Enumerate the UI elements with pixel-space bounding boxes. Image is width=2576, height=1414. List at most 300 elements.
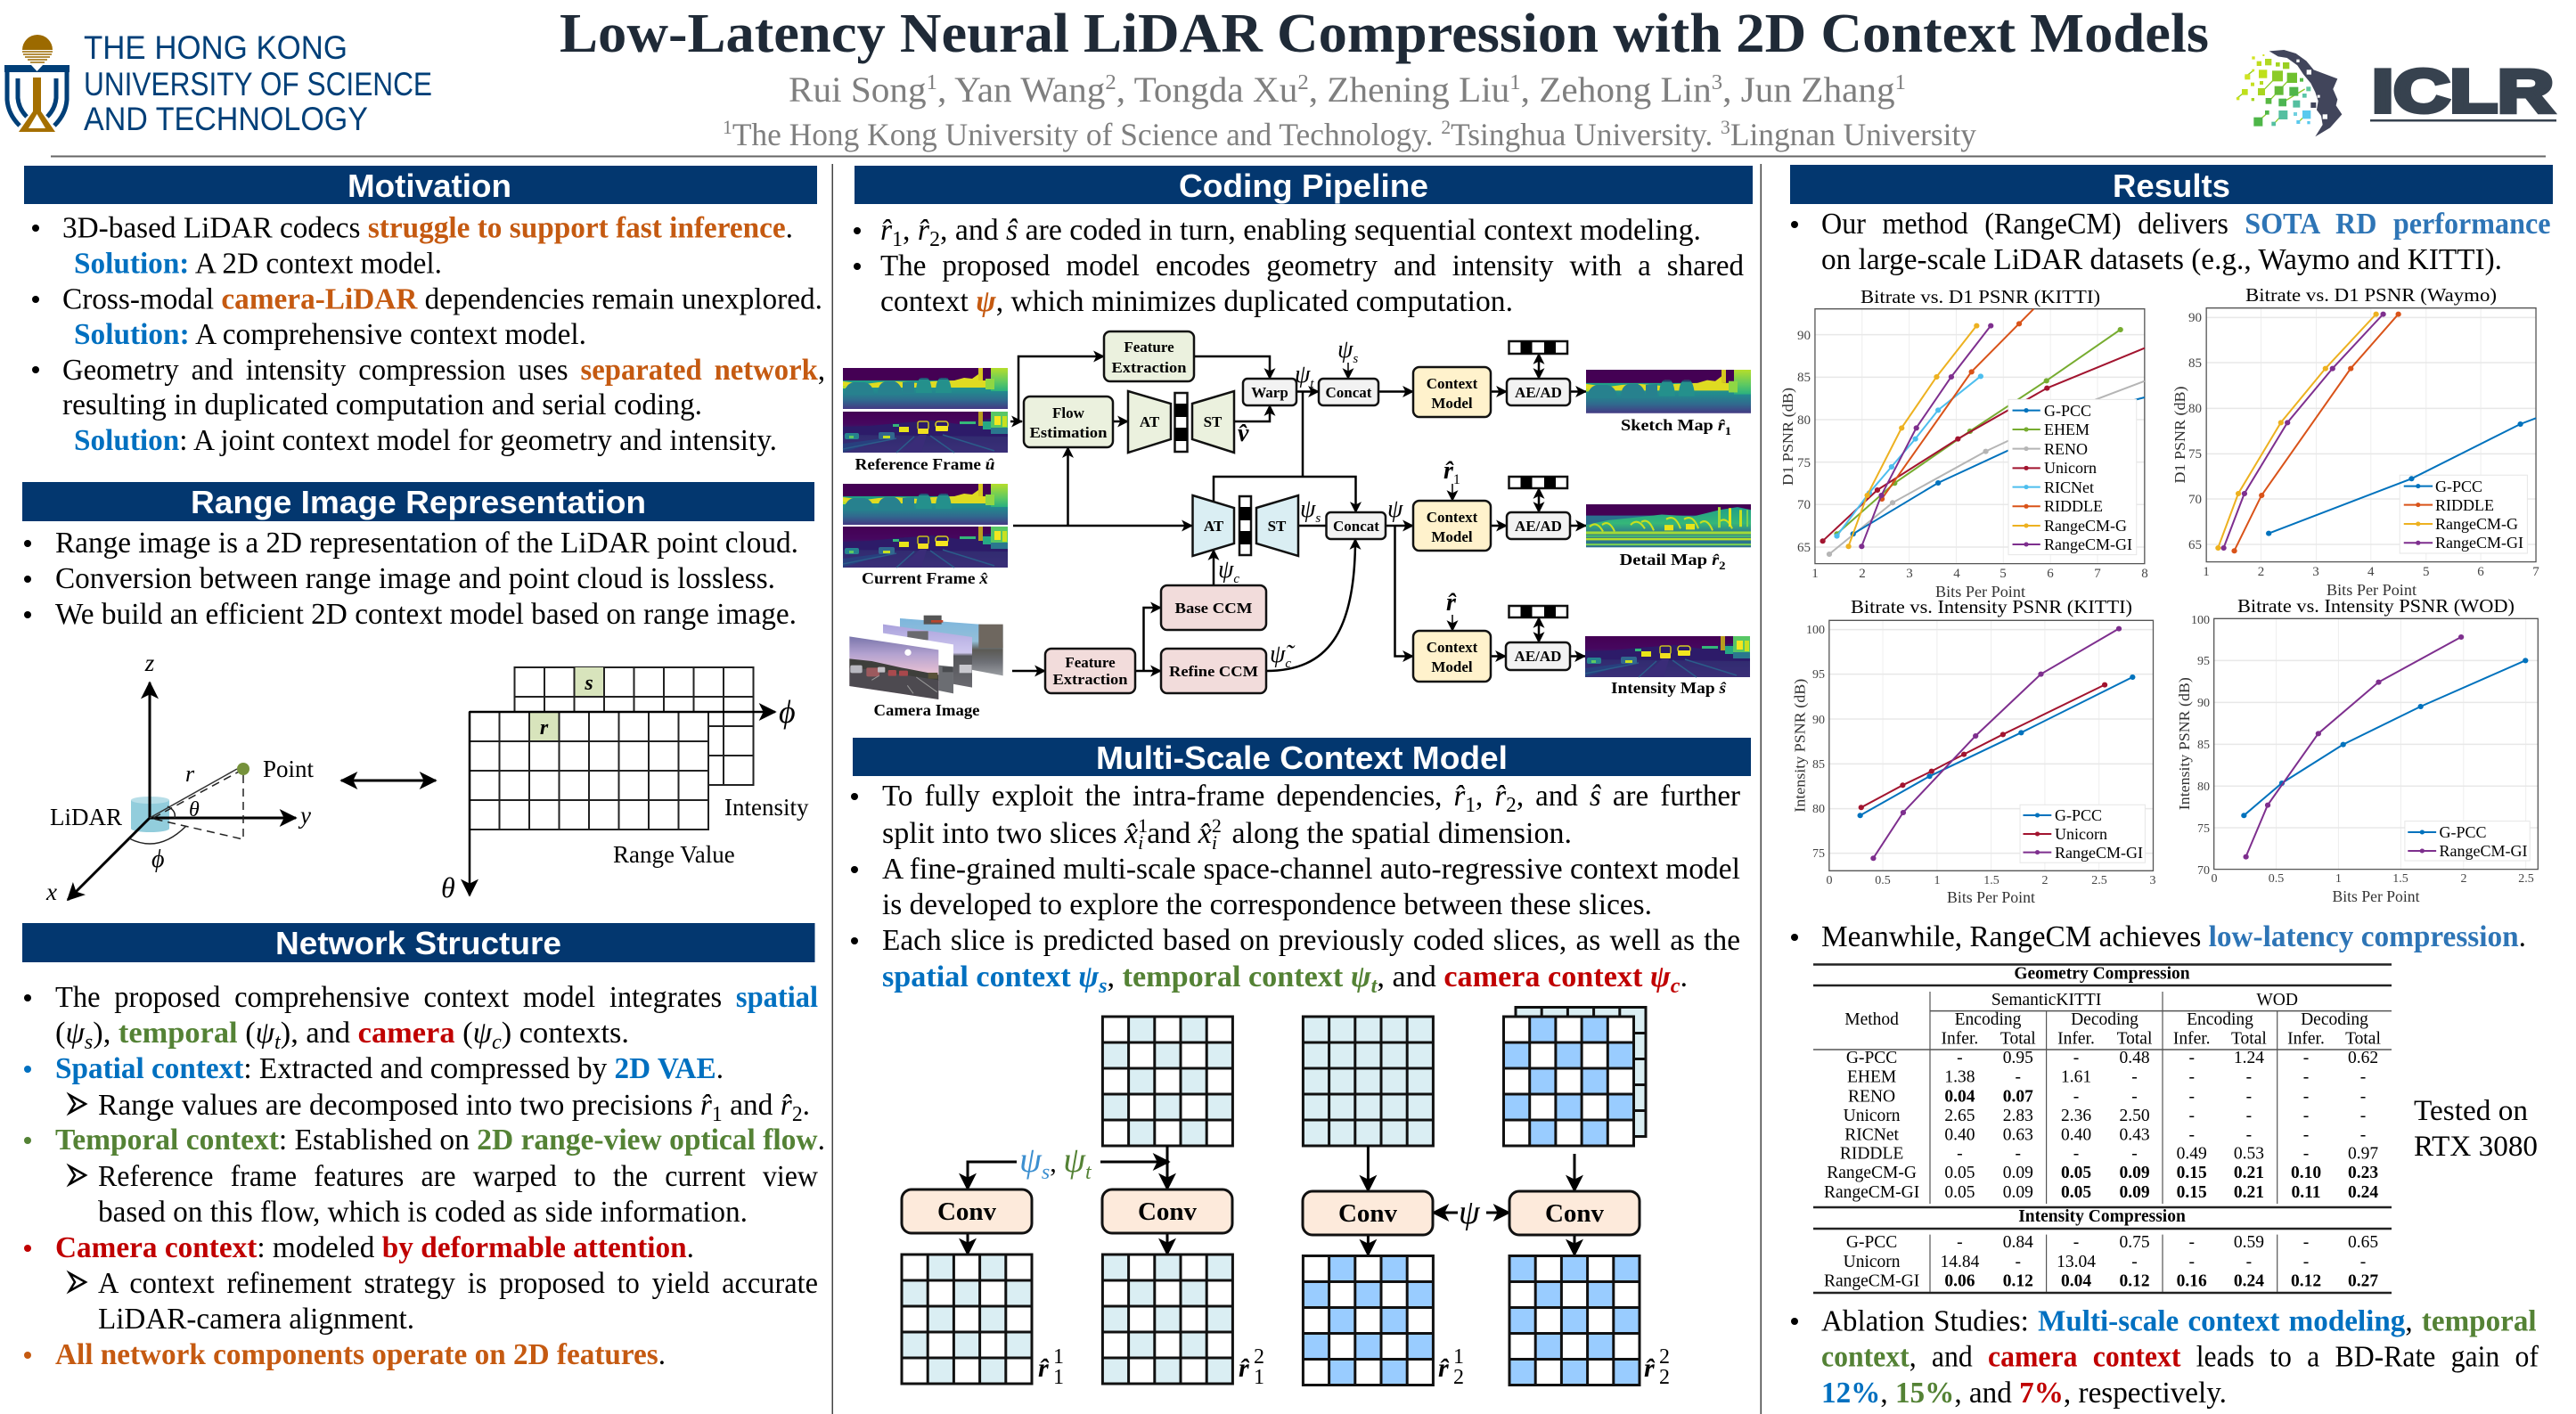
chart: bitrate vs D1 PSNR Waymo: 80	[2188, 402, 2202, 416]
text block: motivation bullets: 3D-based LiDAR codecs struggle to support fast inference.	[62, 212, 793, 244]
table rows: geometry compression: EHEM	[1847, 1068, 1896, 1087]
text block: multi-scale bullets: is developed to explore the correspondence between these slices.	[882, 888, 1652, 921]
table rows: intensity compression: -	[2188, 1233, 2195, 1252]
labels: pipeline math symbols: ψ	[1300, 495, 1315, 523]
box: conv 1	[902, 1189, 1032, 1233]
panel: network structure	[22, 923, 825, 1371]
chart: bitrate vs D1 PSNR KITTI: RIDDLE	[2044, 497, 2103, 515]
labels: slice names: 1	[1254, 1366, 1264, 1389]
table rows: geometry compression: 0.40	[1944, 1126, 1975, 1144]
table rows: geometry compression: 0.09	[2003, 1183, 2033, 1202]
table rows: intensity compression: -	[1957, 1233, 1963, 1252]
heading: motivation	[24, 166, 817, 204]
text block: multi-scale bullets: along the spatial dimension.	[1224, 817, 1572, 850]
text block: network structure bullets: A context refinement strategy is proposed to yield accurate	[98, 1267, 818, 1300]
table rows: geometry compression: -	[2073, 1145, 2079, 1164]
table rows: intensity compression: G-PCC	[1846, 1233, 1897, 1252]
box: base CCM: Base CCM	[1174, 600, 1253, 617]
chart: bitrate vs D1 PSNR KITTI: D1 PSNR (dB)	[1779, 388, 1796, 486]
heading: coding pipeline	[855, 166, 1753, 204]
chart: bitrate vs D1 PSNR KITTI: G-PCC	[2044, 402, 2091, 420]
box: conv 2	[1102, 1189, 1232, 1233]
table rows: geometry compression: -	[2360, 1107, 2366, 1125]
authors: 2	[1105, 71, 1116, 94]
authors: , Zehong Lin	[1521, 69, 1712, 110]
table column headers: Total	[2231, 1030, 2267, 1049]
label: detail map: 2	[1719, 559, 1725, 572]
authors: , Jun Zhang	[1722, 69, 1895, 110]
grid: input full light	[1303, 1017, 1433, 1146]
autoencoder: main AT and ST: ST	[1268, 518, 1287, 535]
text block: coding pipeline bullets: ŝ are coded in turn, enabling sequential context modeling.	[1006, 214, 1706, 247]
table rows: geometry compression: -	[2016, 1145, 2021, 1164]
labels: pipeline math symbols: s	[1315, 511, 1321, 526]
title: Low-Latency Neural LiDAR Compression with 2D Context Models	[560, 4, 2209, 64]
diagram: LiDAR spherical coordinates: y	[298, 802, 311, 829]
chart: bitrate vs D1 PSNR Waymo	[2171, 284, 2539, 599]
chart: bitrate vs D1 PSNR Waymo: 1	[2203, 565, 2210, 579]
diagram: LiDAR spherical coordinates: θ	[189, 798, 200, 821]
text block: multi-scale bullets: A fine-grained multi-scale space-channel auto-regressive context model	[882, 853, 1740, 886]
grid: output r1 slice 2	[1102, 1255, 1232, 1384]
chart: bitrate vs D1 PSNR Waymo: 2	[2258, 565, 2264, 579]
chart: bitrate vs D1 PSNR KITTI: 7	[2094, 567, 2101, 581]
chart: bitrate vs D1 PSNR Waymo: 75	[2188, 447, 2202, 462]
table rows: geometry compression: 0.62	[2348, 1049, 2378, 1067]
chart: bitrate vs D1 PSNR Waymo: 85	[2188, 356, 2202, 371]
table column headers: Infer.	[1942, 1030, 1978, 1049]
table rows: geometry compression: -	[2303, 1145, 2309, 1164]
table rows: geometry compression: -	[2303, 1068, 2309, 1087]
text block: ablation studies: context, and camera context leads to a BD-Rate gain of	[1821, 1341, 2539, 1374]
authors: 1	[927, 71, 937, 94]
text block: network structure bullets: Spatial context: Extracted and compressed by 2D VAE.	[55, 1052, 724, 1085]
labels: pipeline math symbols: t	[1310, 377, 1314, 391]
label: reference frame: Reference Frame û	[855, 455, 994, 473]
labels: slice names: r̂	[1644, 1353, 1655, 1383]
chart: bitrate vs D1 PSNR KITTI: RENO	[2044, 440, 2088, 458]
chart: bitrate vs intensity PSNR KITTI: 1.5	[1983, 874, 1999, 887]
box: flow estimation: Flow	[1052, 405, 1085, 421]
text block: multi-scale bullets: x̂	[1198, 817, 1212, 850]
label: shared context: ψ	[1459, 1194, 1481, 1231]
chart: bitrate vs D1 PSNR KITTI: 3	[1906, 567, 1913, 581]
text block: low-latency statement: Meanwhile, RangeCM achieves low-latency compression.	[1821, 920, 2526, 953]
table rows: geometry compression: 2.50	[2119, 1107, 2150, 1125]
table rows: geometry compression: 0.24	[2348, 1183, 2378, 1202]
table rows: intensity compression: -	[2188, 1253, 2195, 1271]
heading: coding pipeline: Coding Pipeline	[1179, 168, 1428, 204]
image: intensity map	[1585, 636, 1750, 677]
chart: bitrate vs D1 PSNR KITTI: Bitrate vs. D1 PSNR (KITTI)	[1860, 286, 2100, 307]
bitstream 3	[1509, 606, 1567, 617]
box: refine CCM	[1161, 649, 1266, 693]
table heading: intensity: Intensity Compression	[2018, 1207, 2186, 1226]
table column headers: Infer.	[2173, 1030, 2211, 1049]
autoencoder: flow AT and ST: ST	[1204, 413, 1223, 430]
affiliations: Lingnan University	[1730, 117, 1976, 152]
diagram: LiDAR spherical coordinates: z	[144, 650, 155, 676]
table rows: intensity compression: 13.04	[2057, 1253, 2096, 1271]
chart: bitrate vs D1 PSNR Waymo: 70	[2188, 493, 2202, 507]
table column headers: SemanticKITTI	[1991, 991, 2101, 1009]
box: feature extraction top: Feature	[1124, 339, 1174, 356]
labels: pipeline math symbols: ψ	[1218, 556, 1233, 584]
chart: bitrate vs D1 PSNR KITTI: 65	[1797, 541, 1811, 555]
table rows: geometry compression: 0.97	[2348, 1145, 2378, 1164]
chart: bitrate vs D1 PSNR KITTI: Unicorn	[2044, 459, 2097, 477]
panel: results	[1779, 165, 2553, 1410]
text: university name: UNIVERSITY OF SCIENCE	[84, 66, 432, 102]
text block: motivation bullets	[32, 212, 825, 457]
logo: ICLR	[2237, 50, 2556, 136]
text block: results intro: on large-scale LiDAR datasets (e.g., Waymo and KITTI).	[1821, 243, 2502, 276]
text block: network structure bullets: s	[85, 1031, 93, 1054]
affiliations: 3	[1721, 116, 1730, 138]
chart: bitrate vs intensity PSNR WOD	[2176, 595, 2538, 905]
text block: coding pipeline bullets: , and	[940, 214, 1006, 247]
table column headers: Encoding	[2187, 1010, 2253, 1029]
text block: network structure bullets: based on this flow, which is coded as side information.	[98, 1196, 748, 1229]
table rows: intensity compression: -	[2073, 1233, 2079, 1252]
chart: bitrate vs intensity PSNR WOD: Intensity PSNR (dB)	[2176, 677, 2193, 810]
labels: pipeline math symbols: ψ̃	[1270, 641, 1285, 668]
labels: slice names: r̂	[1438, 1353, 1449, 1383]
chart: bitrate vs D1 PSNR KITTI: Bits Per Point	[1935, 583, 2025, 601]
image: current frame maps	[843, 484, 1008, 568]
heading: motivation: Motivation	[348, 168, 511, 204]
box: context model 2: Model	[1431, 528, 1473, 545]
chart: bitrate vs intensity PSNR KITTI: Bits Per Point	[1947, 888, 2035, 906]
chart: bitrate vs intensity PSNR KITTI: G-PCC	[2055, 806, 2102, 824]
table rows: intensity compression: -	[2303, 1233, 2309, 1252]
table rows: intensity compression: 0.04	[2061, 1272, 2091, 1290]
text block: network structure bullets: temporal (ψ	[119, 1017, 274, 1050]
table rows: geometry compression: 0.21	[2234, 1164, 2264, 1182]
text block: coding pipeline bullets: The proposed model encodes geometry and intensity with a shared	[880, 249, 1744, 282]
heading: results: Results	[2113, 168, 2230, 204]
text block: motivation bullets: Solution: A comprehensive context model.	[74, 318, 586, 351]
table rows: intensity compression: 0.24	[2234, 1272, 2264, 1290]
chart: bitrate vs intensity PSNR KITTI: 2	[2042, 874, 2048, 887]
table rows: geometry compression: 0.21	[2234, 1183, 2264, 1202]
chart: bitrate vs intensity PSNR WOD: 1	[2335, 872, 2342, 886]
diagram: LiDAR spherical coordinates: LiDAR	[50, 804, 122, 830]
table rows: geometry compression: 0.15	[2177, 1164, 2207, 1182]
chart: bitrate vs D1 PSNR KITTI: 75	[1797, 456, 1811, 470]
box: context model 3: Context	[1427, 639, 1478, 656]
chart: bitrate vs intensity PSNR WOD: 70	[2197, 864, 2210, 878]
text block: motivation bullets: resulting in duplicated computation and serial coding.	[62, 388, 702, 421]
chart: bitrate vs intensity PSNR WOD: 1.5	[2392, 872, 2408, 886]
table column headers: WOD	[2256, 991, 2298, 1009]
chart: bitrate vs intensity PSNR KITTI: 100	[1806, 624, 1825, 637]
text block: multi-scale bullets: r̂	[1494, 780, 1507, 813]
table rows: geometry compression: 0.10	[2291, 1164, 2321, 1182]
chart: bitrate vs intensity PSNR WOD: Bitrate vs. Intensity PSNR (WOD)	[2237, 595, 2515, 617]
table rows: geometry compression: 0.48	[2119, 1049, 2150, 1067]
box: context model 1: Context	[1427, 375, 1478, 392]
labels: slice names: 2	[1453, 1366, 1464, 1389]
text block: network structure bullets: All network components operate on 2D features.	[55, 1338, 666, 1371]
text block: motivation bullets: Solution: A joint context model for geometry and intensity.	[74, 424, 777, 457]
labels: pipeline math symbols: ψ	[1387, 495, 1403, 523]
chart: bitrate vs intensity PSNR KITTI: 0	[1827, 874, 1832, 887]
heading: range image representation	[22, 482, 814, 521]
chart: bitrate vs intensity PSNR WOD: 75	[2197, 822, 2210, 836]
text block: multi-scale bullets: 1	[1138, 814, 1148, 837]
table rows: intensity compression: 0.16	[2177, 1272, 2207, 1290]
affiliations: The Hong Kong University of Science and Technology.	[732, 117, 1441, 152]
box: context model 2: Context	[1427, 509, 1478, 526]
chart: bitrate vs D1 PSNR KITTI: 80	[1797, 413, 1811, 428]
diagram: range image grids: s	[584, 672, 593, 695]
box: concat top: Concat	[1326, 384, 1372, 401]
chart: bitrate vs D1 PSNR Waymo: RangeCM-G	[2435, 515, 2518, 533]
text block: network structure bullets: 2	[792, 1103, 803, 1126]
chart: bitrate vs intensity PSNR KITTI: Intensity PSNR (dB)	[1791, 679, 1809, 813]
table rows: intensity compression: -	[2246, 1253, 2252, 1271]
box: concat middle: Concat	[1333, 518, 1379, 535]
text block: network structure bullets: ),	[93, 1017, 119, 1050]
text block: network structure bullets: Reference frame features are warped to the current view	[98, 1160, 818, 1193]
text block: network structure bullets: Camera context: modeled by deformable attention.	[55, 1231, 694, 1264]
table column headers: Total	[2117, 1030, 2153, 1049]
heading: multi-scale context model	[853, 738, 1751, 776]
chart: bitrate vs intensity PSNR WOD: 0	[2212, 872, 2217, 886]
grid: output r1 slice 1	[902, 1255, 1032, 1384]
table rows: intensity compression: 0.06	[1944, 1272, 1975, 1290]
table rows: intensity compression: Unicorn	[1844, 1253, 1901, 1271]
label: spatial and temporal context: t	[1085, 1161, 1092, 1184]
table column headers: Decoding	[2071, 1010, 2138, 1029]
bitstream 1	[1509, 341, 1567, 354]
text block: motivation bullets: Solution: A 2D context model.	[74, 248, 442, 280]
chart: bitrate vs intensity PSNR KITTI: Bitrate vs. Intensity PSNR (KITTI)	[1851, 596, 2132, 617]
table rows: intensity compression	[1824, 1233, 2378, 1290]
chart: bitrate vs intensity PSNR WOD: RangeCM-GI	[2440, 842, 2527, 860]
chart: bitrate vs D1 PSNR KITTI: 4	[1953, 567, 1960, 581]
text block: range image bullets: We build an efficient 2D context model based on range image.	[55, 598, 797, 631]
table rows: geometry compression: 0.53	[2234, 1145, 2264, 1164]
text block: network structure bullets	[24, 981, 825, 1371]
chart: bitrate vs D1 PSNR KITTI: RangeCM-G	[2044, 517, 2127, 535]
panel: coding pipeline	[843, 166, 1753, 719]
table rows: geometry compression: -	[2188, 1107, 2195, 1125]
heading: multi-scale context model: Multi-Scale Context Model	[1096, 740, 1508, 776]
chart: bitrate vs D1 PSNR Waymo: 4	[2367, 565, 2375, 579]
text block: network structure bullets: .	[803, 1089, 810, 1122]
box: base CCM	[1161, 585, 1266, 630]
chart: bitrate vs intensity PSNR KITTI: 0.5	[1875, 874, 1891, 887]
table rows: geometry compression: -	[2188, 1087, 2195, 1106]
table rows: geometry compression: 0.63	[2003, 1126, 2033, 1144]
chart: bitrate vs D1 PSNR KITTI: 2	[1859, 567, 1866, 581]
grid: stacked input	[1504, 1007, 1646, 1146]
text block: multi-scale bullets: 1	[1465, 794, 1476, 817]
text block: motivation bullets: Geometry and intensity compression uses separated network,	[62, 354, 825, 387]
text block: range image bullets: Conversion between range image and point cloud is lossless.	[55, 562, 775, 595]
image: reference frame maps	[843, 368, 1008, 453]
table rows: geometry compression: 0.05	[1944, 1164, 1975, 1182]
table rows: intensity compression: -	[2131, 1253, 2138, 1271]
text block: multi-scale bullets: spatial context ψ	[882, 960, 1099, 993]
text block: ablation studies	[1791, 1304, 2539, 1410]
table rows: intensity compression: 0.27	[2348, 1272, 2378, 1290]
chart: bitrate vs intensity PSNR KITTI: 90	[1812, 714, 1825, 727]
text block: multi-scale bullets: , and	[1377, 960, 1443, 993]
box: AE/AD 3: AE/AD	[1515, 648, 1561, 665]
label: sketch map: Sketch Map r̂	[1621, 416, 1724, 434]
table rows: geometry compression: 0.09	[2003, 1164, 2033, 1182]
table rows: geometry compression: Unicorn	[1844, 1107, 1901, 1125]
table rows: geometry compression: 1.61	[2061, 1068, 2091, 1087]
table rows: geometry compression: -	[1957, 1145, 1963, 1164]
table rows: geometry compression: -	[2131, 1087, 2138, 1106]
labels: pipeline math symbols: 1	[1453, 472, 1460, 487]
table rows: geometry compression: -	[2188, 1126, 2195, 1144]
box: conv 1: Conv	[937, 1197, 997, 1226]
table heading: geometry: Geometry Compression	[2014, 965, 2190, 984]
box: conv 3	[1303, 1191, 1433, 1235]
labels: slice names: r̂	[1239, 1353, 1249, 1383]
chart: bitrate vs intensity PSNR KITTI: 1	[1934, 874, 1941, 887]
chart: bitrate vs intensity PSNR KITTI: 80	[1812, 803, 1825, 816]
chart: bitrate vs D1 PSNR KITTI: 5	[1999, 567, 2007, 581]
box: warp	[1243, 379, 1296, 405]
text block: network structure bullets: Range values are decomposed into two precisions r̂	[98, 1089, 712, 1122]
bitstream 2	[1509, 477, 1567, 488]
chart: bitrate vs D1 PSNR Waymo: RIDDLE	[2435, 496, 2494, 514]
affiliations: Tsinghua University.	[1451, 117, 1721, 152]
table rows: geometry compression: G-PCC	[1846, 1049, 1897, 1067]
chart: bitrate vs D1 PSNR Waymo: 6	[2477, 565, 2484, 579]
table rows: intensity compression: 0.12	[2291, 1272, 2321, 1290]
labels: pipeline math symbols	[1218, 336, 1460, 671]
chart: bitrate vs D1 PSNR KITTI: 1	[1811, 567, 1819, 581]
box: feature extraction top: Extraction	[1112, 359, 1187, 376]
authors: , Zhening Liu	[1309, 69, 1509, 110]
table rows: geometry compression: -	[2246, 1126, 2252, 1144]
text block: multi-scale bullets	[851, 780, 1741, 998]
box: concat top	[1319, 379, 1378, 405]
chart: bitrate vs D1 PSNR KITTI: RangeCM-GI	[2044, 535, 2132, 553]
diagram: LiDAR spherical coordinates: ϕ	[151, 846, 164, 873]
text block: network structure bullets: and	[723, 1089, 781, 1122]
chart: bitrate vs intensity PSNR KITTI: Unicorn	[2055, 825, 2107, 843]
image: detail map	[1586, 504, 1751, 547]
chart: bitrate vs D1 PSNR Waymo: D1 PSNR (dB)	[2171, 387, 2188, 483]
box: context model 1: Model	[1431, 395, 1473, 412]
authors: 1	[1509, 71, 1521, 94]
table rows: geometry compression: -	[2360, 1068, 2366, 1087]
box: conv 3: Conv	[1338, 1199, 1398, 1228]
table rows: geometry compression: 0.23	[2348, 1164, 2378, 1182]
chart: bitrate vs D1 PSNR Waymo: 90	[2188, 311, 2202, 325]
autoencoder: flow AT and ST	[1128, 391, 1234, 453]
table rows: geometry compression: 0.05	[2061, 1183, 2091, 1202]
table rows: geometry compression: -	[2131, 1068, 2138, 1087]
diagram: LiDAR spherical coordinates	[45, 650, 315, 905]
text block: network structure bullets: LiDAR-camera alignment.	[98, 1303, 414, 1336]
chart: bitrate vs intensity PSNR KITTI: 2.5	[2091, 874, 2107, 887]
text block: coding pipeline bullets	[854, 214, 1744, 318]
text block: results intro: Our method (RangeCM) delivers SOTA RD performance	[1821, 208, 2550, 241]
diagram: range image grids: r	[540, 716, 549, 740]
text: university name: AND TECHNOLOGY	[84, 101, 368, 137]
box: context model 3	[1413, 631, 1491, 682]
table rows: intensity compression: -	[2016, 1253, 2021, 1271]
table rows: geometry compression: -	[2073, 1049, 2079, 1067]
labels: pipeline math symbols: c	[1285, 657, 1291, 671]
table rows: intensity compression: 14.84	[1940, 1253, 1980, 1271]
box: AE/AD 2: AE/AD	[1515, 518, 1562, 535]
text block: motivation bullets: Cross-modal camera-LiDAR dependencies remain unexplored.	[62, 283, 822, 315]
table rows: geometry compression: -	[1957, 1049, 1963, 1067]
arrows: pipeline connections	[1010, 354, 1586, 671]
table rows: geometry compression: 0.49	[2177, 1145, 2207, 1164]
labels: pipeline math symbols: ψ	[1295, 361, 1310, 388]
box: flow estimation: Estimation	[1030, 424, 1108, 441]
label: current frame: Current Frame x̂	[862, 569, 988, 587]
box: AE/AD 1	[1507, 379, 1570, 405]
table rows: geometry compression: -	[2131, 1145, 2138, 1164]
text block: multi-scale bullets: ŝ are further	[1590, 780, 1745, 813]
table rows: geometry compression: RENO	[1848, 1087, 1895, 1106]
text block: multi-scale bullets: s	[1098, 975, 1107, 998]
labels: slice names: 1	[1053, 1366, 1064, 1389]
chart: bitrate vs D1 PSNR KITTI: 70	[1797, 498, 1811, 512]
grid: input slice checkerboard	[1102, 1017, 1232, 1146]
chart: bitrate vs intensity PSNR WOD: G-PCC	[2440, 823, 2487, 841]
table rows: geometry compression: -	[2360, 1087, 2366, 1106]
box: AE/AD 3	[1506, 642, 1570, 670]
table rows: geometry compression: 2.65	[1944, 1107, 1975, 1125]
text block: multi-scale bullets: temporal context ψ	[1123, 960, 1371, 993]
box: conv 4	[1509, 1191, 1640, 1235]
text block: network structure bullets: r̂	[781, 1089, 793, 1122]
table rows: geometry compression: 0.09	[2119, 1164, 2150, 1182]
diagram: range image grids: Intensity	[724, 794, 809, 821]
table rows: geometry compression: -	[2303, 1087, 2309, 1106]
table rows: geometry compression: 1.38	[1944, 1068, 1975, 1087]
table rows: geometry compression: RangeCM-G	[1827, 1164, 1917, 1182]
authors: , Yan Wang	[937, 69, 1105, 110]
text block: multi-scale bullets: 2	[1506, 794, 1517, 817]
chart: bitrate vs intensity PSNR WOD: 0.5	[2269, 872, 2284, 886]
table column headers	[1844, 991, 2381, 1049]
text block: network structure bullets: (ψ	[55, 1017, 85, 1050]
chart: bitrate vs intensity PSNR KITTI	[1791, 596, 2156, 906]
table rows: geometry compression: 0.05	[1944, 1183, 1975, 1202]
text block: multi-scale bullets: i	[1212, 831, 1217, 854]
chart: bitrate vs intensity PSNR KITTI: 85	[1812, 758, 1825, 772]
diagram: checkerboard context model	[902, 1007, 1670, 1389]
table column headers: Infer.	[2287, 1030, 2325, 1049]
chart: bitrate vs intensity PSNR WOD: 90	[2197, 697, 2210, 710]
diagram: LiDAR spherical coordinates: Point	[263, 756, 315, 782]
text block: multi-scale bullets: t	[1371, 975, 1378, 998]
table rows: geometry compression: -	[2303, 1049, 2309, 1067]
chart: bitrate vs D1 PSNR KITTI: 90	[1797, 329, 1811, 343]
diagram: range image grids: ϕ	[779, 694, 796, 730]
text block: network structure bullets: t	[274, 1031, 282, 1054]
text block: multi-scale bullets: ,	[1107, 960, 1123, 993]
text block: multi-scale bullets: ,	[1476, 780, 1494, 813]
text block: coding pipeline bullets: ,	[903, 214, 918, 247]
callout: tested on RTX 3080	[2414, 1095, 2538, 1163]
authors: 3	[1712, 71, 1722, 94]
